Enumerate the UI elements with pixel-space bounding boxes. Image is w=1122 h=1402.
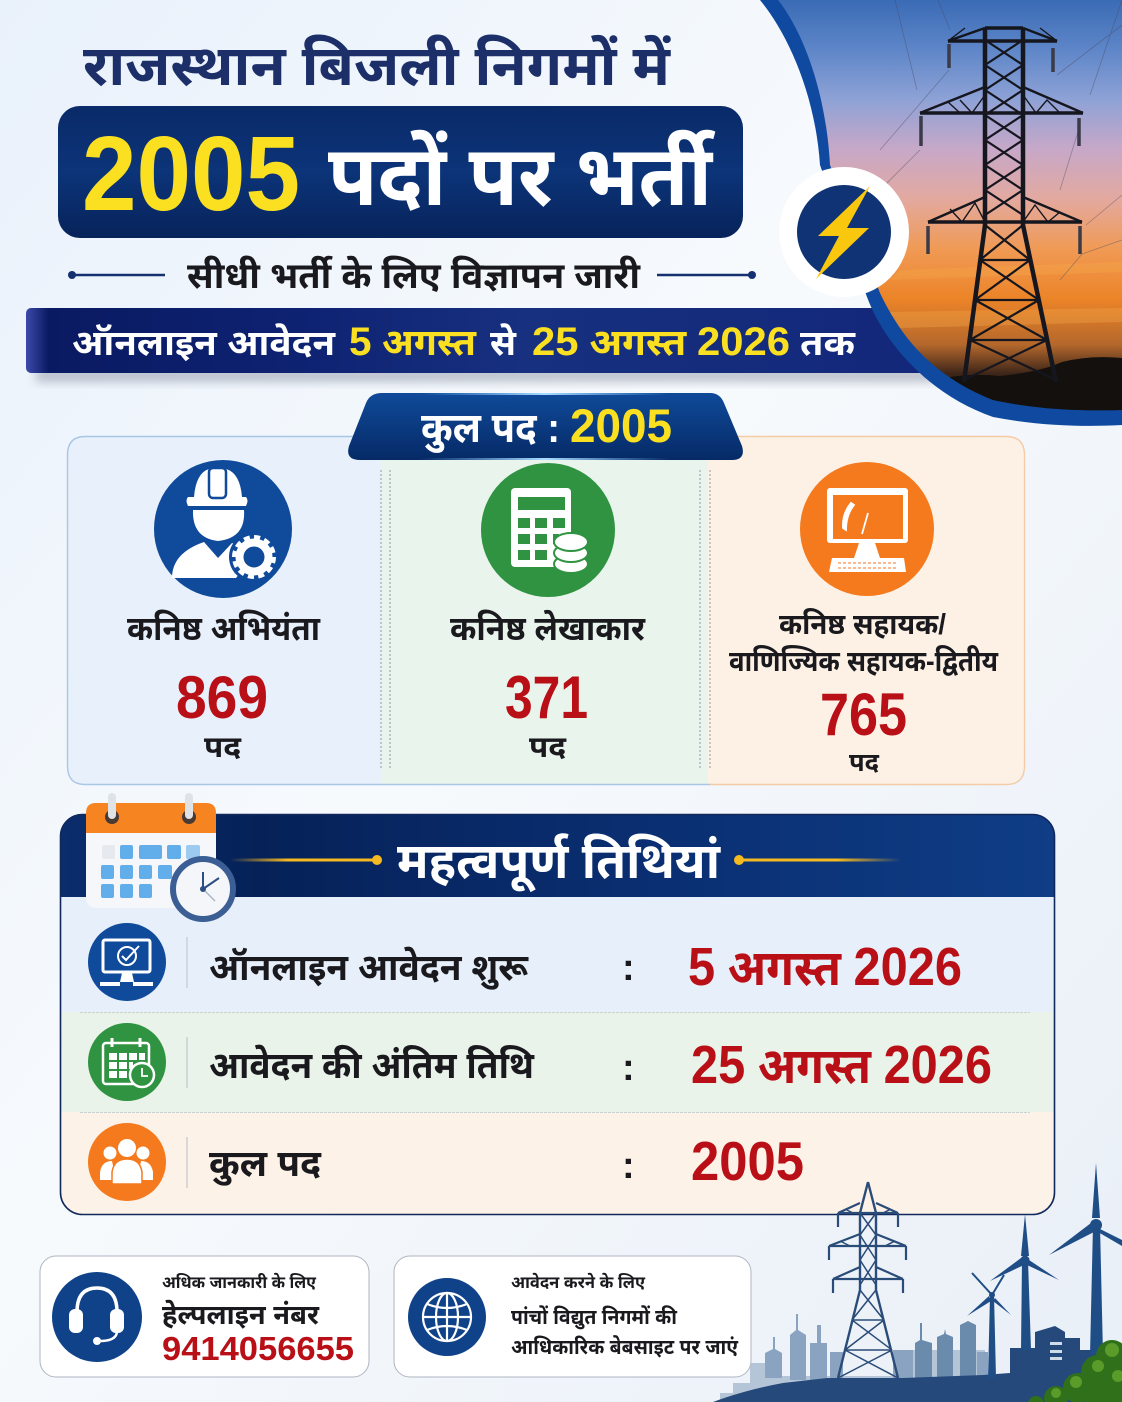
row: last date: :: [622, 1047, 635, 1089]
website card: पांचों विद्युत निगमों की: [511, 1305, 678, 1330]
heading: important dates: [230, 833, 901, 893]
row: total posts: [88, 1123, 804, 1201]
application dates strip: तक: [800, 324, 856, 363]
column: junior assistant: 765: [820, 681, 907, 748]
icon: lightning bolt badge: [779, 167, 909, 297]
headline banner: 2005: [82, 115, 300, 233]
row: total posts: 2005: [691, 1130, 804, 1192]
column: junior assistant: कनिष्ठ सहायक/: [779, 608, 946, 641]
total posts pill: कुल पद :: [421, 404, 560, 453]
icon: calendar clock: [88, 1023, 166, 1101]
row: total posts: :: [622, 1145, 635, 1187]
column: junior accountant: पद: [529, 731, 567, 764]
icon: calculator with coins: [481, 463, 615, 597]
row: application start: :: [622, 947, 635, 989]
icon: globe: [408, 1278, 486, 1356]
website card: आवेदन करने के लिए: [511, 1272, 646, 1292]
row: last date: 25 अगस्त 2026: [691, 1035, 992, 1095]
column: junior accountant: कनिष्ठ लेखाकार: [450, 609, 646, 648]
heading: important dates: महत्वपूर्ण तिथियां: [397, 833, 721, 893]
column: junior assistant: [729, 462, 999, 777]
helpline card: अधिक जानकारी के लिए: [162, 1272, 317, 1292]
panel: important dates: [60, 797, 1054, 1214]
column: junior assistant: पद: [849, 747, 879, 777]
helpline card: 9414056655: [162, 1330, 354, 1367]
application dates strip: से: [490, 323, 517, 363]
headline banner: पदों पर भर्ती: [328, 129, 716, 223]
subheading with ornaments: [68, 254, 756, 296]
icon: computer: [800, 462, 934, 596]
column: junior engineer: कनिष्ठ अभियंता: [127, 610, 321, 648]
row: application start: 5 अगस्त 2026: [688, 937, 962, 997]
application dates strip: [26, 308, 946, 382]
helpline card: [40, 1256, 369, 1377]
icon: headset: [52, 1272, 142, 1362]
application dates strip: 5 अगस्त: [349, 320, 477, 364]
helpline card: हेल्पलाइन नंबर: [162, 1299, 320, 1330]
row: application start: ऑनलाइन आवेदन शुरू: [209, 946, 529, 990]
title: राजस्थान बिजली निगमों में: [83, 34, 672, 97]
column: junior engineer: 869: [176, 664, 268, 731]
icon: monitor check: [88, 923, 166, 1001]
subheading with ornaments: सीधी भर्ती के लिए विज्ञापन जारी: [187, 254, 641, 296]
headline banner: [58, 106, 743, 238]
row: total posts: कुल पद: [209, 1143, 322, 1186]
icon: engineer with gear: [154, 460, 292, 598]
application dates strip: 25 अगस्त 2026: [532, 320, 790, 364]
website card: आधिकारिक बेबसाइट पर जाएं: [511, 1335, 739, 1359]
total posts pill: 2005: [570, 399, 672, 452]
application dates strip: ऑनलाइन आवेदन: [72, 323, 337, 363]
panel: post counts: [67, 436, 1024, 784]
column: junior assistant: वाणिज्यिक सहायक-द्वितीय: [729, 645, 999, 678]
column: junior accountant: [450, 463, 646, 764]
illustration: city skyline, pylon and wind turbines: [713, 1163, 1122, 1402]
total posts pill: [348, 393, 743, 460]
icon: people: [88, 1123, 166, 1201]
row: last date: [88, 1023, 992, 1101]
column: junior engineer: [127, 460, 321, 764]
icon: calendar with clock: [86, 797, 233, 919]
website card: [394, 1256, 751, 1377]
photo: transmission tower at sunset: [760, 0, 1122, 426]
row: application start: [88, 923, 962, 1001]
column: junior accountant: 371: [505, 664, 588, 731]
row: last date: आवेदन की अंतिम तिथि: [209, 1044, 535, 1086]
column: junior engineer: पद: [204, 731, 242, 764]
